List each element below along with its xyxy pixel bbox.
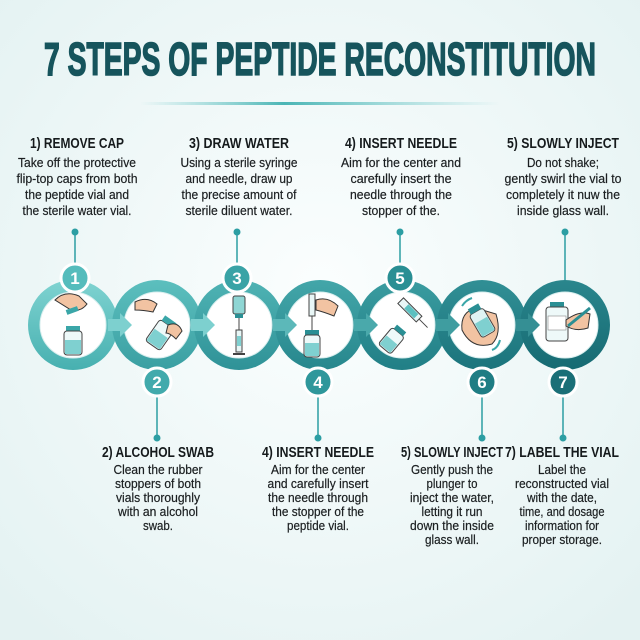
number badges: 5: [395, 269, 405, 288]
text: step 7 label the vial: proper storage.: [522, 532, 602, 547]
icon: step 7 label vial: [546, 302, 590, 341]
title: [44, 33, 596, 105]
text: step 4 insert needle (bottom): and carefully insert: [268, 476, 369, 491]
number badges: 2: [152, 373, 162, 392]
text: step 2 alcohol swab: swab.: [143, 518, 173, 533]
text: step 2 alcohol swab: Clean the rubber: [114, 462, 203, 477]
text: step 5 slowly inject (bottom): glass wall.: [425, 532, 479, 547]
text: step 1 remove cap: the sterile water vial.: [22, 203, 132, 218]
icon: step 1 remove cap: [55, 294, 87, 355]
text: step 7 label the vial: Label the: [538, 462, 586, 477]
text: step 3 draw water: sterile diluent water.: [186, 203, 292, 218]
text: step 7 label the vial: [505, 444, 619, 547]
text: step 5 slowly inject (bottom): Gently push the: [411, 462, 493, 477]
text: step 5 slowly inject (bottom): inject the water,: [410, 490, 494, 505]
text: step 4 insert needle (top): Aim for the center and: [341, 155, 461, 170]
icon: step 4 insert needle: [304, 294, 338, 357]
number badges: 6: [477, 373, 487, 392]
text: step 5 slowly inject (top): Do not shake;: [527, 155, 599, 170]
text: step 4 insert needle (top): stopper of the.: [362, 203, 440, 218]
text: step 7 label the vial: with the date,: [526, 490, 597, 505]
text: step 3 draw water: the precise amount of: [182, 187, 297, 202]
text: step 4 insert needle (bottom): the needle through: [268, 490, 368, 505]
text: step 4 insert needle (top): [341, 135, 461, 218]
text: step 2 alcohol swab: 2) ALCOHOL SWAB: [102, 444, 214, 461]
text: step 1 remove cap: 1) REMOVE CAP: [30, 135, 124, 152]
text: step 4 insert needle (top): carefully insert the: [350, 171, 452, 186]
text: step 3 draw water: [180, 135, 298, 218]
text: step 1 remove cap: flip-top caps from both: [16, 171, 138, 186]
number badges: [61, 264, 577, 396]
text: step 1 remove cap: [16, 135, 138, 218]
text: step 5 slowly inject (top): inside glass wall.: [517, 203, 609, 218]
text: step 4 insert needle (top): 4) INSERT NEEDLE: [345, 135, 457, 152]
text: step 4 insert needle (top): needle through the: [350, 187, 452, 202]
text: step 5 slowly inject (top): completely it nuw the: [506, 187, 620, 202]
text: step 5 slowly inject (bottom): [401, 444, 503, 547]
text: step 5 slowly inject (bottom): letting it run: [422, 504, 482, 519]
text: step 4 insert needle (bottom): Aim for the center: [271, 462, 366, 477]
text: step 5 slowly inject (bottom): down the inside: [410, 518, 494, 533]
icon: step 6 swirl: [462, 298, 500, 350]
text: step 7 label the vial: information for: [525, 518, 600, 533]
text: step 4 insert needle (bottom): peptide vial.: [287, 518, 349, 533]
icon: step 2 alcohol swab: [135, 299, 182, 351]
text: step 2 alcohol swab: stoppers of both: [115, 476, 201, 491]
arrows between steps: [108, 313, 540, 337]
ring chain: [28, 280, 610, 370]
text: step 7 label the vial: time, and dosage: [520, 504, 604, 519]
number badges: 3: [232, 269, 242, 288]
text: step 2 alcohol swab: vials thoroughly: [116, 490, 200, 505]
text: step 2 alcohol swab: with an alcohol: [117, 504, 198, 519]
icon: step 5 slowly inject: [378, 298, 430, 354]
text: step 1 remove cap: Take off the protective: [18, 155, 136, 170]
text: step 5 slowly inject (top): gently swirl the vial to: [504, 171, 622, 186]
text: step 4 insert needle (bottom): the stopper of the: [272, 504, 364, 519]
number badges: 7: [558, 373, 568, 392]
text: step 5 slowly inject (top): [504, 135, 622, 218]
connector lines: [72, 228, 568, 442]
text: step 3 draw water: Using a sterile syringe: [180, 155, 298, 170]
text: step 1 remove cap: the peptide vial and: [25, 187, 129, 202]
text: step 2 alcohol swab: [102, 444, 214, 533]
text: step 4 insert needle (bottom): 4) INSERT NEEDLE: [262, 444, 374, 461]
text: step 3 draw water: and needle, draw up: [186, 171, 292, 186]
text: step 5 slowly inject (bottom): 5) SLOWLY INJECT: [401, 444, 503, 461]
icon: step 3 draw water: [233, 296, 245, 354]
text: step 5 slowly inject (bottom): plunger to: [426, 476, 478, 491]
number badges: 1: [70, 269, 80, 288]
text: step 4 insert needle (bottom): [262, 444, 374, 533]
text: step 7 label the vial: reconstructed vial: [515, 476, 609, 491]
number badges: 4: [313, 373, 323, 392]
text: step 3 draw water: 3) DRAW WATER: [189, 135, 289, 152]
